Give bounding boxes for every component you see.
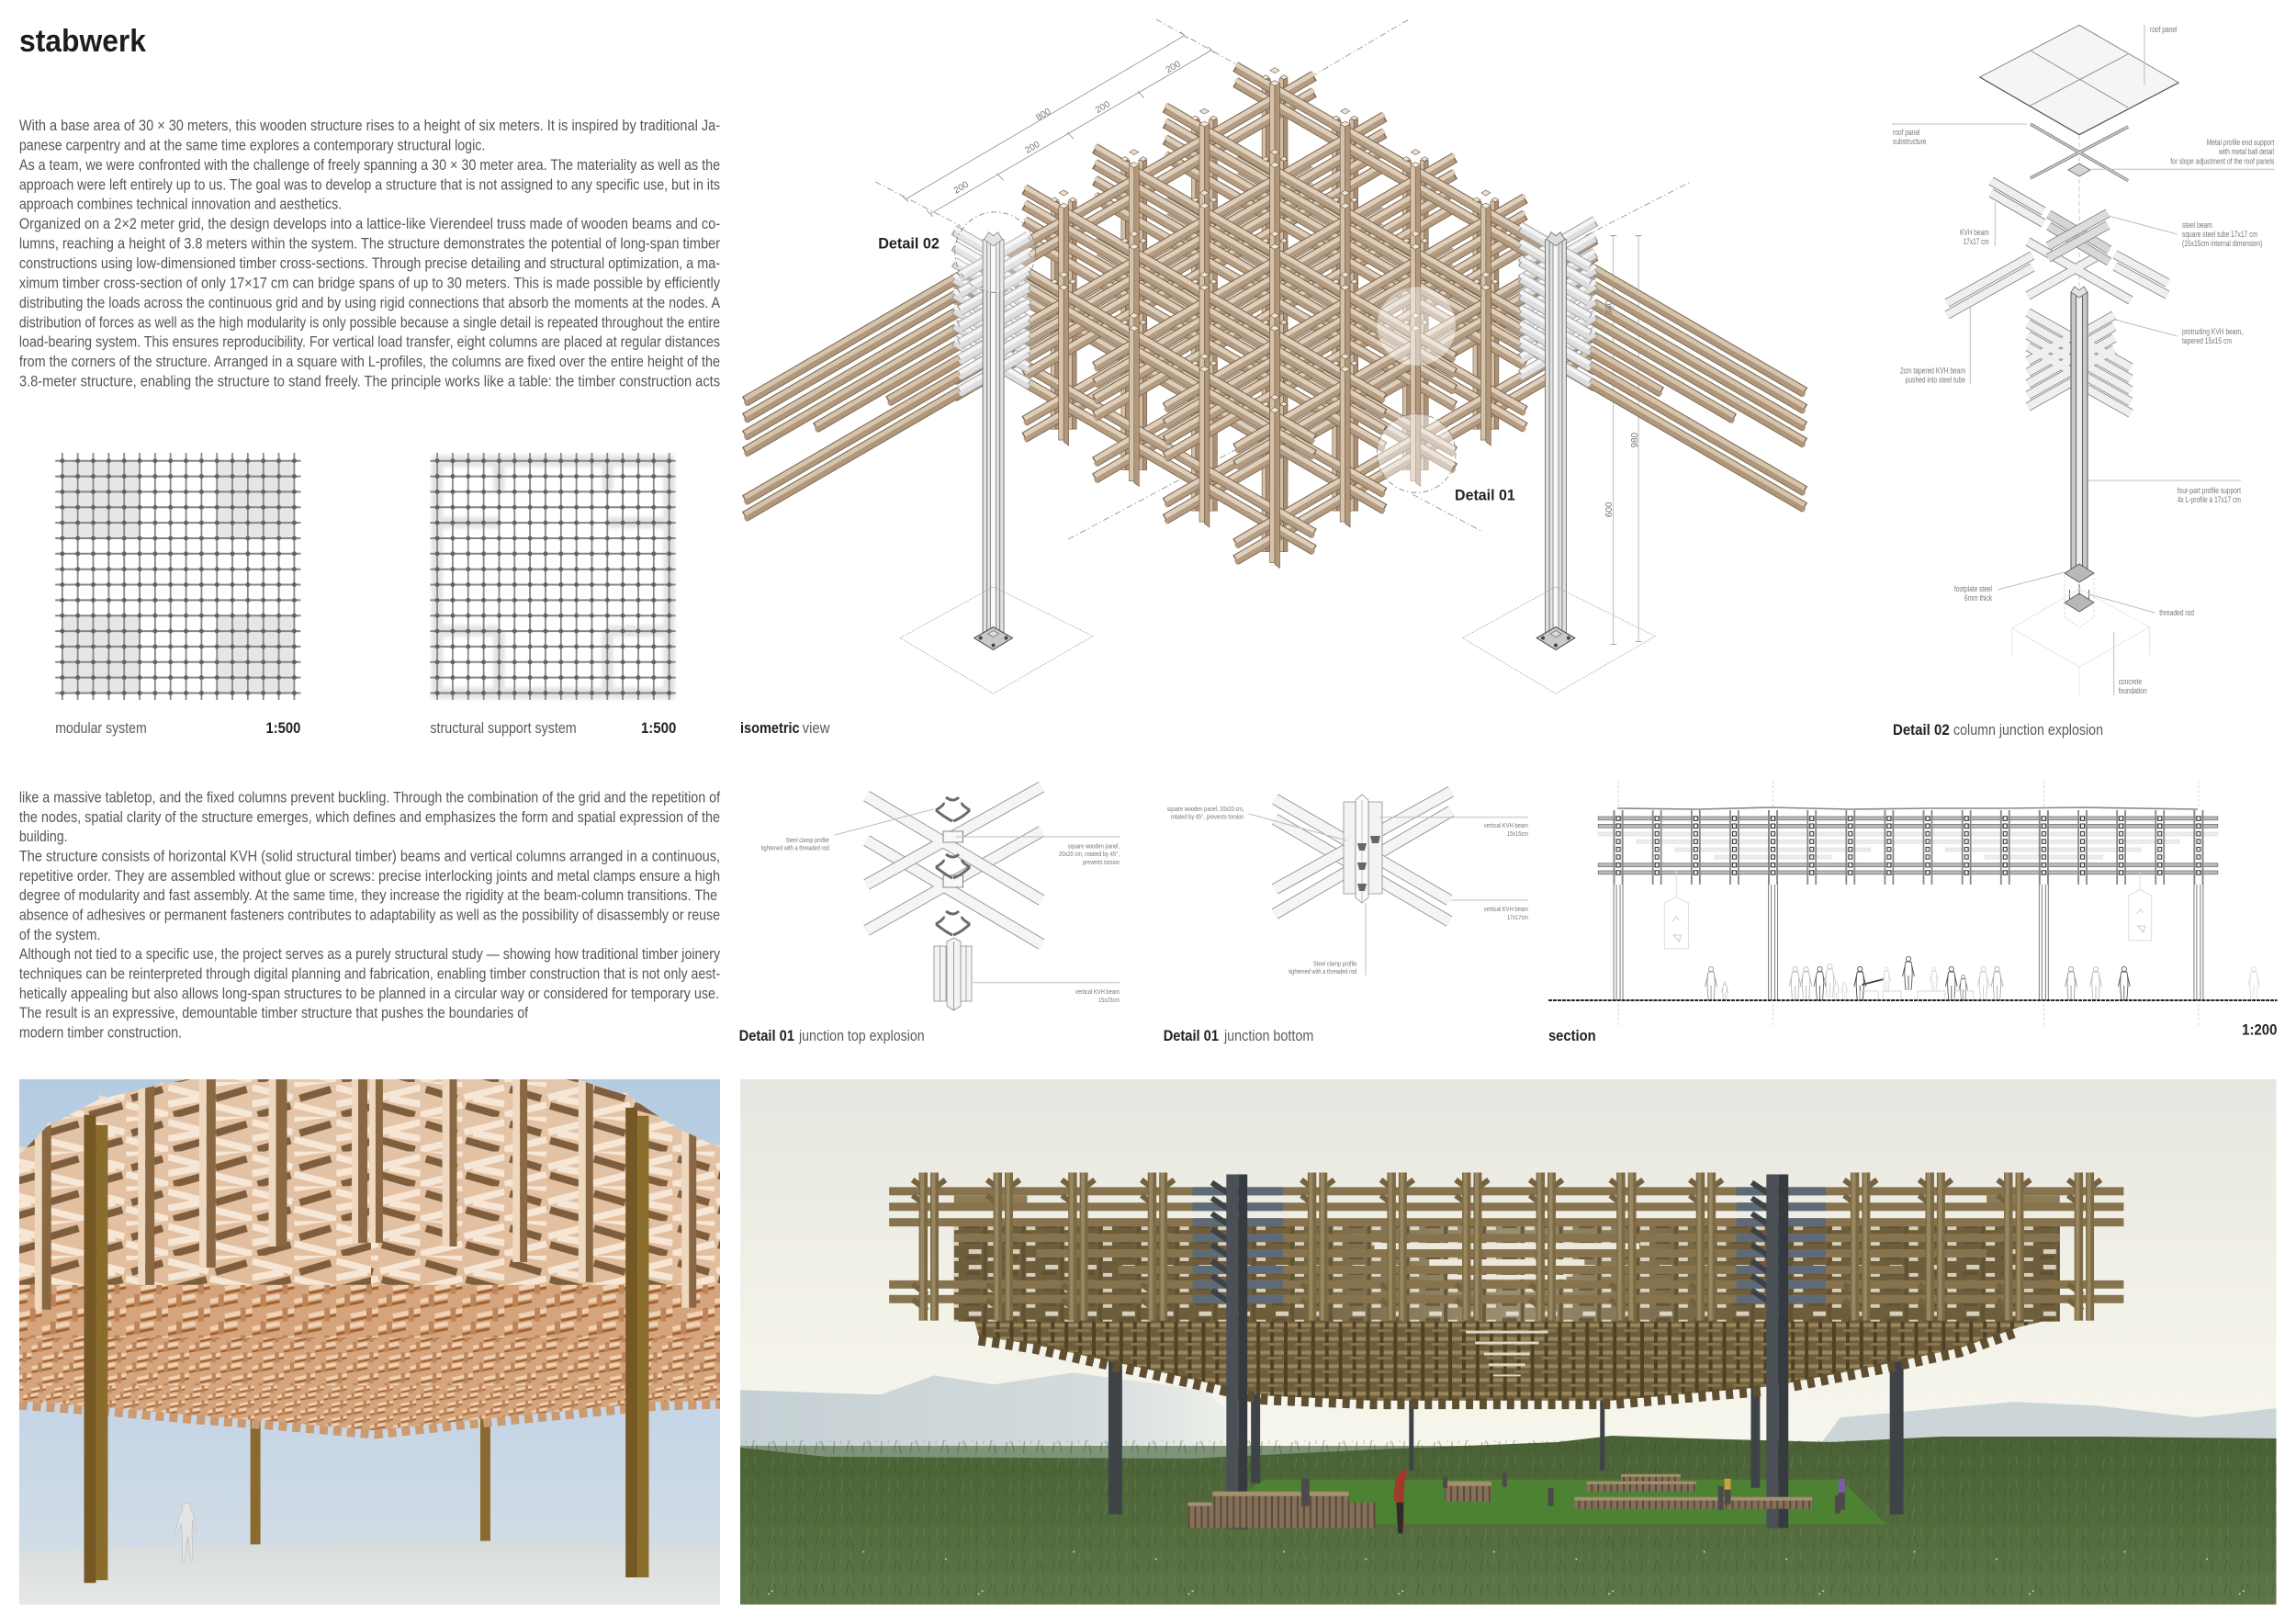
panel: modular system plan <box>55 453 301 737</box>
callout labels: footplate steel <box>1954 584 1992 593</box>
callout labels: 2cm tapered KVH beam <box>1900 366 1965 375</box>
beam lattice <box>954 64 1595 568</box>
callout labels: foundation <box>2119 686 2147 695</box>
caption: Detail 02: column junction explosion <box>1953 721 2103 739</box>
roof line <box>1617 807 2198 809</box>
hanging lanterns <box>1664 870 2152 949</box>
callouts: vertical KVH beam <box>1075 987 1120 996</box>
panel: physical model photo <box>19 1079 720 1607</box>
text block: project description part 1: load-bearing system. This ensures reproducibility. For vertical load transfer, eight columns are placed at regular distances <box>19 333 720 351</box>
callout labels: Metal profile end support <box>2207 138 2275 147</box>
label: Detail 02: Detail 02 <box>878 235 940 253</box>
main beams <box>1598 817 2218 874</box>
callout labels: 4x L-profile à 17x17 cm <box>2178 495 2241 504</box>
lawn under roof <box>1192 1480 1886 1525</box>
callout labels: concrete <box>2119 677 2142 686</box>
front brass columns <box>84 1108 648 1583</box>
text block: project description part 2: the nodes, spatial clarity of the structure emerges, which defines and emphasizes the form and spatial expression of the <box>19 808 720 826</box>
text block: project description part 1: distributing the loads across the continuous grid and by using rigid connections that absorb the moments at the nodes. A <box>19 294 721 311</box>
callouts: tightened with a threaded rod <box>761 843 829 852</box>
left steel column <box>900 232 1093 694</box>
front steel columns <box>1211 1174 1788 1529</box>
ground line <box>1548 999 2278 1001</box>
dimension labels: 800 <box>1034 107 1053 123</box>
callout labels <box>1893 25 2275 695</box>
dimension labels: 200 <box>952 179 971 197</box>
back brass columns <box>251 1408 490 1544</box>
callouts: vertical KVH beam <box>1484 905 1528 913</box>
dimension labels: 380 <box>1604 299 1615 315</box>
callouts: square wooden panel, 20x20 cm, <box>1167 805 1244 813</box>
callouts: vertical KVH beam <box>1484 821 1528 829</box>
text block: project description part 1: panese carpentry and at the same time explores a contemporary structural logic. <box>19 136 485 153</box>
callouts: prevents torsion <box>1083 858 1120 866</box>
callouts: 15x15cm <box>1098 996 1120 1004</box>
text block: project description part 2: The structure consists of horizontal KVH (solid structural timber) beams and vertical columns arranged in a continuous, <box>19 847 720 865</box>
detail highlight circles <box>955 212 1456 492</box>
thin rear columns <box>1109 1345 1904 1515</box>
text block: project description part 1: 3.8-meter structure, enabling the structure to stand freely. The principle works like a table: the timber construction acts <box>19 373 720 390</box>
vertical timbers and clamps <box>1344 795 1382 903</box>
caption: Detail 02 <box>1893 721 2103 739</box>
callout labels: KVH beam <box>1960 228 1989 237</box>
text block: project description part 2: repetitive order. They are assembled without glue or screws: precise interlocking joints and metal clamps ensure a high <box>19 867 720 885</box>
text block: project description part 2: degree of modularity and fast assembly. At the same time, they increase the rigidity at the beam-column transitions. The <box>19 886 717 904</box>
panel: modular system plan: 1:500 <box>266 719 300 737</box>
dimension lines <box>875 19 1691 644</box>
panel: modular system plan: modular system <box>55 719 147 737</box>
text block: project description part 1: approach combines technical innovation and aesthetics. <box>19 196 342 213</box>
dimension labels: 600 <box>1604 502 1615 517</box>
assembled beams <box>1275 792 1451 921</box>
grass hills <box>740 1436 2277 1607</box>
timber lattice model <box>19 1079 720 1436</box>
model base floor <box>19 1540 720 1607</box>
dimension labels: 200 <box>1165 59 1183 75</box>
timber platforms <box>1188 1474 1812 1528</box>
callout labels: tapered 15x15 cm <box>2182 336 2232 345</box>
callout labels: square steel tube 17x17 cm <box>2182 230 2257 239</box>
callout labels: 6mm thick <box>1964 593 1992 603</box>
caption: Detail 01 top <box>739 1027 925 1044</box>
caption: isometric view: isometric <box>740 719 800 737</box>
callouts: 20x20 cm, rotated by 45°, <box>1059 850 1120 858</box>
text block: project description part 2: modern timber construction. <box>19 1023 182 1042</box>
callout labels: four-part profile support <box>2178 486 2241 495</box>
caption: isometric view: view <box>803 719 830 737</box>
caption: Detail 01 bottom <box>1164 1027 1313 1044</box>
text block: project description part 1 <box>19 117 721 390</box>
dimension labels <box>952 59 1640 517</box>
left cantilever beams <box>745 228 1029 519</box>
text block: project description part 1: Organized on a 2×2 meter grid, the design develops into a lattice-like Vierendeel truss made of wooden beams and co- <box>19 215 720 232</box>
steel connector plates <box>1192 1187 1826 1303</box>
text block: project description part 1: approach were left entirely up to us. The goal was to develop a structure that is not assigned to any specific use, but in its <box>19 175 720 193</box>
upper lattice box <box>954 1195 2060 1322</box>
callouts: 15x15cm <box>1507 829 1528 838</box>
callout labels: (15x15cm internal dimension) <box>2182 239 2262 248</box>
text block: project description part 2: The result is an expressive, demountable timber structure that pushes the boundaries of <box>19 1004 528 1021</box>
beam stack and column <box>2028 287 2131 573</box>
panel: isometric view <box>740 19 1805 737</box>
callout lines <box>1892 25 2275 695</box>
caption: Detail 01 bottom: Detail 01 <box>1164 1027 1219 1044</box>
caption: section: section <box>1548 1027 1596 1044</box>
text block: project description part 1: As a team, we were confronted with the challenge of freely spanning a 30 × 30 meter area. The materiality as well as the <box>19 156 720 174</box>
callout labels: with metal ball detail <box>2218 147 2274 156</box>
text block: project description part 2: techniques can be reinterpreted through digital planning and fabrication, enabling timber construction that is not only aest- <box>19 964 720 983</box>
right steel column <box>1463 232 1655 694</box>
text block: project description part 1: distribution of forces as well as the high modularity is only possible because a single detail is repeated throughout the entire <box>19 313 720 331</box>
dimension labels: 200 <box>1023 140 1042 156</box>
right cantilever beams <box>1521 219 1805 511</box>
caption: Detail 01 top: junction top explosion <box>798 1027 925 1044</box>
roof panel substructure <box>2031 124 2128 287</box>
vertical KVH timbers <box>934 938 972 1010</box>
title: stabwerk <box>19 24 146 59</box>
callout labels: 17x17 cm <box>1964 237 1989 246</box>
text block: project description part 1: ximum timber cross-section of only 17×17 cm can bridge spans of up to 30 meters. This is made possible by efficiently <box>19 274 721 291</box>
callouts: square wooden panel, <box>1068 841 1120 851</box>
callouts: Steel clamp profile <box>786 836 829 844</box>
scale figure <box>175 1504 197 1562</box>
panel: section drawing <box>1548 781 2278 1044</box>
text block: project description part 2: Although not tied to a specific use, the project serves as a purely structural study — showing how traditional timber joinery <box>19 945 720 963</box>
callouts <box>761 809 1120 1004</box>
panel: landscape rendering <box>740 1079 2277 1607</box>
vertical timber posts <box>913 1172 2101 1321</box>
caption: Detail 01 top: Detail 01 <box>739 1027 794 1044</box>
text block: project description part 2 <box>19 788 720 1042</box>
people in rendering <box>1301 1470 1845 1533</box>
roof panel <box>1980 25 2178 135</box>
protruding timber ends <box>19 1086 720 1433</box>
grass texture <box>740 1440 2277 1607</box>
callouts: tightened with a threaded rod <box>1289 967 1356 976</box>
callout labels: substructure <box>1893 137 1927 146</box>
dimension labels: 980 <box>1630 432 1640 448</box>
panel: Detail 01 junction top explosion <box>739 787 1120 1044</box>
distant plain <box>740 1446 1465 1459</box>
flowers <box>768 1551 2245 1595</box>
caption: Detail 02: Detail 02 <box>1893 721 1950 739</box>
sky <box>740 1079 2277 1463</box>
exploded beams <box>1947 181 2167 315</box>
steel clamps <box>936 797 970 935</box>
callouts <box>1167 805 1528 976</box>
callout labels: steel beam <box>2182 220 2212 230</box>
callouts: Steel clamp profile <box>1313 959 1356 968</box>
text block: project description part 1: lumns, reaching a height of 3.8 meters within the system. The structure demonstrates the potential of long-span timber <box>19 235 720 253</box>
caption: Detail 01 bottom: junction bottom <box>1223 1027 1313 1044</box>
sky backdrop <box>19 1079 720 1607</box>
dimension labels: 200 <box>1094 99 1112 116</box>
text block: project description part 2: building. <box>19 828 68 845</box>
columns <box>1614 781 2203 1025</box>
panel: Detail 01 junction bottom <box>1164 792 1528 1044</box>
text block: project description part 2: hetically appealing but also allows long-span structures to be planned in a circular way or considered for temporary use. <box>19 985 719 1002</box>
ghost partial beams <box>1598 832 2218 859</box>
text block: project description part 2: absence of adhesives or permanent fasteners contributes to adaptability as well as the possibility of disassembly or reuse <box>19 906 720 924</box>
horizontal timber beams <box>889 1187 2123 1303</box>
text block: project description part 1: constructions using low-dimensioned timber cross-sections. Through precise detailing and structural optimization, a ma- <box>19 254 720 272</box>
panel: structural support system plan: 1:500 <box>641 719 676 737</box>
text block: project description part 1: from the corners of the structure. Arranged in a square with L-profiles, the columns are fixed over the entire height of the <box>19 353 720 370</box>
callout labels: roof panel <box>2150 25 2177 34</box>
text block: project description part 1: With a base area of 30 × 30 meters, this wooden structure rises to a height of six meters. It is inspired by traditional Ja- <box>19 117 720 134</box>
panel: structural support system plan: structural support system <box>430 719 577 737</box>
callout labels: pushed into steel tube <box>1906 375 1965 384</box>
callouts: rotated by 45°, prevents torsion <box>1171 812 1244 821</box>
callout labels: protruding KVH beam, <box>2182 327 2243 336</box>
scale: 1:200: 1:200 <box>2242 1021 2277 1039</box>
callout labels: roof panel <box>1893 128 1919 137</box>
crossed beams <box>867 787 1041 944</box>
callout labels: threaded rod <box>2159 608 2194 617</box>
text block: project description part 2: of the system. <box>19 926 100 943</box>
panel: Detail 02 column junction explosion <box>1892 25 2275 739</box>
label: Detail 01: Detail 01 <box>1455 486 1515 503</box>
callouts: 17x17cm <box>1507 913 1528 921</box>
footplate and foundation <box>2012 564 2150 696</box>
people <box>1705 956 2260 1000</box>
panel: structural support system plan <box>430 453 677 737</box>
mountains <box>740 1372 2277 1449</box>
bowl underside of roof lattice <box>974 1320 2050 1404</box>
text block: project description part 2: like a massive tabletop, and the fixed columns prevent buckling. Through the combination of the grid and the repetition of <box>19 788 720 806</box>
